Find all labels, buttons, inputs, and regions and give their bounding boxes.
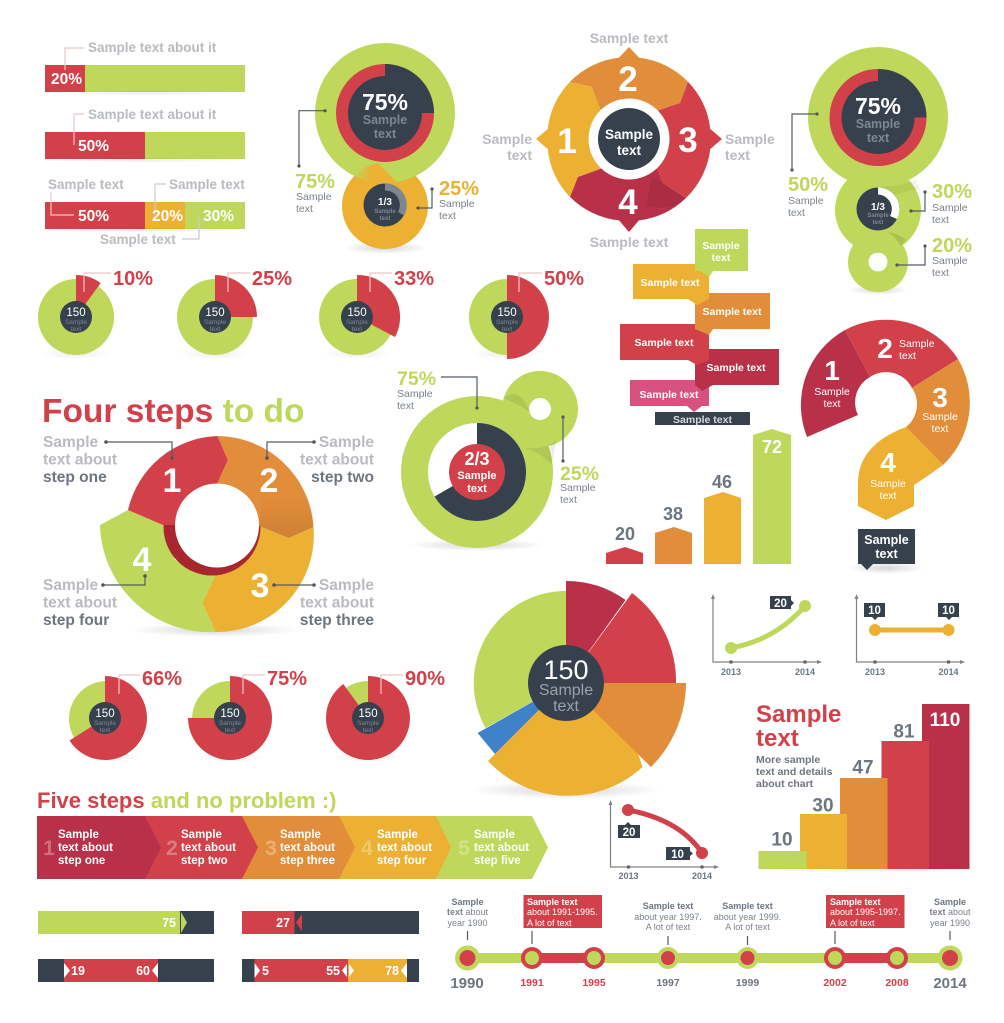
chart: chained donuts 50 30 20 percent: text xyxy=(932,267,949,279)
callout: dark sample text xyxy=(858,529,915,570)
chart: four steps ring: step three xyxy=(300,612,374,629)
line chart: falling 20 to 10 xyxy=(608,800,719,881)
chart: four arrow wheel: 4 xyxy=(618,183,638,222)
pie: 66 percent: Sample xyxy=(94,720,116,727)
pie: 10 percent: Sample xyxy=(65,319,87,326)
row: small pies 10 to 50 percent xyxy=(38,268,584,359)
bar: 20 percent xyxy=(45,40,245,96)
node: 1995 xyxy=(582,947,606,989)
note: red box 1995-1997 xyxy=(826,895,904,944)
chart: four steps ring: Sample xyxy=(319,577,374,594)
note: year 1997: about year 1997. xyxy=(634,912,702,922)
chart: five step arrows: text about xyxy=(474,842,529,854)
note: red box 1995-1997: Sample text xyxy=(830,897,881,907)
chart: chained donuts 50 30 20 percent: text xyxy=(873,220,883,226)
pie: 90 percent xyxy=(326,668,445,762)
bar: 50 20 30 percent: Sample text xyxy=(169,177,245,192)
pie: 25 percent: text xyxy=(210,326,220,333)
row: small pies 66 to 90 percent xyxy=(69,668,445,762)
chart: four arrow wheel: text xyxy=(507,147,532,163)
chart: looped donut two thirds: 25% xyxy=(560,463,599,485)
chart: four steps ring: text about xyxy=(300,594,374,612)
pie: 25 percent: 25% xyxy=(252,268,292,290)
line chart: rising 20: 2014 xyxy=(795,667,815,677)
title: five steps: Five steps and no problem :) xyxy=(37,788,336,813)
chart: question mark segments: text xyxy=(880,490,897,502)
note: red box 1991-1995: about 1991-1995. xyxy=(527,907,598,917)
line chart: falling 20 to 10: 10 xyxy=(671,849,684,861)
pie: 33 percent xyxy=(319,268,434,359)
note: year 2014: text about xyxy=(929,907,971,917)
chart: four arrow wheel: 2 xyxy=(618,60,638,99)
chart: question mark segments: 3 xyxy=(932,382,948,413)
range bar: 27 xyxy=(242,911,419,934)
note: year 1999: about year 1999. xyxy=(714,912,781,922)
tag: pink xyxy=(630,380,709,412)
bar: 50 20 30 percent: Sample text xyxy=(100,232,176,247)
chart: chained donuts 50 30 20 percent: 50% xyxy=(788,174,828,196)
chart: looped donut two thirds: text xyxy=(467,483,487,495)
line chart: rising 20: 20 xyxy=(774,598,787,610)
chart: question mark segments: text xyxy=(899,350,916,362)
note: year 2014: Sample xyxy=(934,897,966,907)
tag: red xyxy=(620,324,709,365)
chart: exploded pie 150: 150 xyxy=(543,655,589,685)
tag: amber xyxy=(633,264,709,305)
chart: linked donuts 75 and 25 percent: Sample xyxy=(363,113,407,127)
range bar: 75 xyxy=(38,911,214,934)
chart: arrow bars 20 38 46 72: 38 xyxy=(663,504,683,524)
note: year 1999: A lot of text xyxy=(725,922,770,932)
chart: five step arrows: step two xyxy=(181,855,228,867)
chart: five step arrows: 1 xyxy=(43,837,55,860)
chart: five step arrows: Sample xyxy=(474,829,515,841)
line chart: flat 10: 10 xyxy=(868,605,881,617)
bar: 50 percent xyxy=(45,107,245,163)
line chart: rising 20 xyxy=(711,594,822,677)
note: red box 1991-1995: A lot of text xyxy=(527,918,572,928)
chart: five step arrows: step five xyxy=(474,855,521,867)
tag: orange: Sample text xyxy=(703,306,762,318)
pie: 90 percent: 150 xyxy=(358,708,378,720)
chart: chained donuts 50 30 20 percent: 75% xyxy=(855,93,901,119)
pie: 10 percent: 10% xyxy=(113,268,153,290)
chart: stair bars: 10 xyxy=(771,830,793,850)
bar: 50 20 30 percent: Sample text xyxy=(48,177,124,192)
callout: dark sample text: Sample xyxy=(864,533,909,547)
chart: looped donut two thirds: 2/3 xyxy=(464,449,490,469)
chart: chained donuts 50 30 20 percent: text xyxy=(932,214,949,226)
chart: chained donuts 50 30 20 percent: Sample xyxy=(932,255,968,267)
chart: four steps ring: 4 xyxy=(133,541,152,579)
node: 2002: 2002 xyxy=(823,977,847,989)
note: year 2014: year 1990 xyxy=(930,918,970,928)
note: year 1999: Sample text xyxy=(722,901,773,911)
note: year 1997 xyxy=(634,901,702,945)
chart: five step arrows: 3 xyxy=(265,837,277,860)
chart: linked donuts 75 and 25 percent: 25% xyxy=(439,178,479,200)
chart: five step arrows: Sample xyxy=(58,829,99,841)
chart: four arrow wheel: text xyxy=(725,147,750,163)
chart: five step arrows: step one xyxy=(58,855,105,867)
note: year 1990: text about xyxy=(447,907,489,917)
pie: 75 percent: 75% xyxy=(267,668,307,690)
node: 2008: 2008 xyxy=(885,977,909,989)
chart: five step arrows: 2 xyxy=(166,837,178,860)
bar: 50 20 30 percent: 50% xyxy=(78,208,109,225)
pie: 50 percent: text xyxy=(502,326,512,333)
pie: 66 percent: 150 xyxy=(95,708,115,720)
pie: 75 percent xyxy=(188,668,307,762)
note: year 1997: Sample text xyxy=(643,901,693,911)
pie: 66 percent: text xyxy=(100,727,110,734)
range bar: 19 to 60: 19 xyxy=(71,964,85,978)
node: 2002 xyxy=(823,947,847,989)
note: year 1990 xyxy=(447,897,489,940)
pie: 90 percent: text xyxy=(363,727,373,734)
tag: crimson xyxy=(695,349,779,391)
chart: question mark segments: Sample xyxy=(899,338,935,350)
chart: question mark segments: Sample xyxy=(814,386,850,398)
line chart: falling 20 to 10: 2013 xyxy=(618,871,639,881)
chart: looped donut two thirds: text xyxy=(397,400,414,412)
chart: linked donuts 75 and 25 percent xyxy=(295,43,479,254)
timeline xyxy=(447,895,971,992)
chart: five step arrows: text about xyxy=(181,842,236,854)
note: year 1997: A lot of text xyxy=(646,922,691,932)
node: 2008 xyxy=(885,947,909,989)
pie: 25 percent xyxy=(177,268,292,359)
chart: four steps ring: text about xyxy=(300,452,374,468)
chart: four arrow wheel: 1 xyxy=(557,122,577,161)
chart: arrow bars 20 38 46 72: 46 xyxy=(712,472,732,492)
note: red box 1991-1995 xyxy=(524,895,602,944)
chart: four arrow wheel: Sample xyxy=(725,131,775,147)
chart: five step arrows: Sample xyxy=(181,829,222,841)
chart: chained donuts 50 30 20 percent: Sample xyxy=(788,195,824,207)
tag: green: Sample xyxy=(702,240,740,252)
chart: stair bars xyxy=(754,701,974,873)
chart: stair bars: 47 xyxy=(852,758,874,778)
chart: stair bars: More sample xyxy=(756,754,820,766)
chart: chained donuts 50 30 20 percent: text xyxy=(788,207,805,219)
note: year 1990: year 1990 xyxy=(447,918,488,928)
pie: 66 percent: 66% xyxy=(142,668,182,690)
note: red box 1995-1997: about 1995-1997. xyxy=(830,907,901,917)
chart: chained donuts 50 30 20 percent: 1/3 xyxy=(871,202,885,213)
node: 1991 xyxy=(520,947,544,989)
line chart: falling 20 to 10: 2014 xyxy=(692,871,712,881)
note: year 2014 xyxy=(929,897,971,940)
tag: green: text xyxy=(712,252,731,264)
pie: 90 percent: Sample xyxy=(357,720,379,727)
chart: exploded pie 150: text xyxy=(553,698,579,715)
chart: four arrow wheel: Sample xyxy=(605,127,653,142)
tag: crimson: Sample text xyxy=(707,362,766,374)
title: four steps to do: Four steps to do xyxy=(42,393,304,430)
chart: linked donuts 75 and 25 percent: 75% xyxy=(362,89,408,115)
bar: 20 percent: 20% xyxy=(51,71,82,88)
pie: 25 percent: 150 xyxy=(205,307,225,319)
line chart: falling 20 to 10: 20 xyxy=(623,827,635,839)
tag: dark xyxy=(655,412,750,426)
pie: 33 percent: 33% xyxy=(394,268,434,290)
chart: chained donuts 50 30 20 percent: 30% xyxy=(932,181,972,203)
node: 1995: 1995 xyxy=(582,977,606,989)
chart: five step arrows: 4 xyxy=(361,837,373,860)
pie: 66 percent xyxy=(69,668,182,762)
pie: 75 percent: Sample xyxy=(219,720,241,727)
note: year 1999 xyxy=(714,901,781,945)
pie: 90 percent: 90% xyxy=(405,668,445,690)
chart: chained donuts 50 30 20 percent: Sample xyxy=(856,117,900,131)
pie: 10 percent: 150 xyxy=(66,307,86,319)
chart: linked donuts 75 and 25 percent: Sample xyxy=(439,198,475,210)
chart: stair bars: about chart xyxy=(756,778,814,790)
chart: question mark segments xyxy=(801,320,970,574)
bar: 50 percent: 50% xyxy=(78,138,109,155)
chart: four steps ring: 3 xyxy=(251,567,269,605)
node: 1997: 1997 xyxy=(656,977,680,989)
chart: five step arrows: text about xyxy=(280,842,335,854)
chart: linked donuts 75 and 25 percent: text xyxy=(374,127,397,141)
chart: stair bars: text and details xyxy=(756,766,833,778)
chart: chained donuts 50 30 20 percent: Sample xyxy=(932,202,968,214)
chart: arrow bars 20 38 46 72: 20 xyxy=(615,524,635,544)
pie: 33 percent: Sample xyxy=(346,319,368,326)
chart: four steps ring: Sample xyxy=(43,577,99,594)
chart: linked donuts 75 and 25 percent: text xyxy=(380,216,390,222)
pie: 10 percent xyxy=(38,268,153,359)
chart: linked donuts 75 and 25 percent: Sample xyxy=(296,191,332,203)
line chart: rising 20: 2013 xyxy=(721,667,741,677)
chart: looped donut two thirds: Sample xyxy=(397,388,433,400)
bar: 50 20 30 percent xyxy=(45,177,245,247)
chart: exploded pie 150: Sample xyxy=(539,682,593,699)
node: 1990 xyxy=(450,946,484,992)
chart: stair bars: 30 xyxy=(812,796,834,816)
chart: four steps ring: Sample xyxy=(319,434,374,451)
chart: four steps ring: text about xyxy=(43,452,117,468)
chart: question mark segments: 4 xyxy=(880,447,896,478)
pie: 50 percent: Sample xyxy=(496,319,518,326)
line chart: flat 10 xyxy=(854,594,965,677)
chart: four steps ring: step two xyxy=(311,469,374,486)
chart: looped donut two thirds xyxy=(397,368,599,551)
line chart: flat 10: 2013 xyxy=(865,667,885,677)
pie: 75 percent: text xyxy=(225,727,235,734)
node: 1997 xyxy=(656,947,680,989)
chart: question mark segments: Sample xyxy=(870,478,906,490)
chart: chained donuts 50 30 20 percent: text xyxy=(867,131,890,145)
chart: four arrow wheel: 3 xyxy=(678,121,698,160)
chart: four steps ring: step four xyxy=(43,612,109,629)
chart: arrow bars 20 38 46 72: 72 xyxy=(762,437,782,457)
node: 1991: 1991 xyxy=(520,977,544,989)
chart: linked donuts 75 and 25 percent: 75% xyxy=(295,171,335,193)
chart: four arrow wheel xyxy=(482,30,775,250)
chart: five step arrows: step three xyxy=(280,855,335,867)
range bars xyxy=(38,911,419,982)
pie: 50 percent xyxy=(469,268,584,359)
chart: arrow bars 20 38 46 72 xyxy=(606,429,791,564)
chart: stair bars: 110 xyxy=(930,710,960,731)
bar: 50 20 30 percent: 20% xyxy=(152,208,183,225)
range bar: 5 55 78: 55 xyxy=(326,964,340,978)
range bar: 27: 27 xyxy=(276,916,290,930)
pie: 75 percent: 150 xyxy=(220,708,240,720)
range bar: 75: 75 xyxy=(162,916,176,930)
chart: linked donuts 75 and 25 percent: 1/3 xyxy=(378,197,392,208)
range bar: 19 to 60 xyxy=(38,959,214,982)
chart: chained donuts 50 30 20 percent xyxy=(788,47,972,295)
pie: 50 percent: 50% xyxy=(544,268,584,290)
chart: linked donuts 75 and 25 percent: text xyxy=(439,210,456,222)
chart: five step arrows xyxy=(37,816,548,879)
chart: five step arrows: Sample xyxy=(377,829,418,841)
range bar: 5 55 78 xyxy=(242,959,419,982)
tag: dark: Sample text xyxy=(673,414,732,426)
node: 2014: 2014 xyxy=(933,975,967,992)
tag: pink: Sample text xyxy=(640,389,699,401)
chart: five step arrows: text about xyxy=(58,842,113,854)
pie: 10 percent: text xyxy=(71,326,81,333)
chart: stair bars: Sample xyxy=(756,701,841,728)
panel: progress bars xyxy=(45,40,245,247)
chart: five step arrows: text about xyxy=(377,842,432,854)
bar: 20 percent: Sample text about it xyxy=(88,40,217,55)
note: red box 1995-1997: A lot of text xyxy=(830,918,875,928)
pie: 25 percent: Sample xyxy=(204,319,226,326)
chart: four steps ring: 1 xyxy=(163,462,181,500)
chart: looped donut two thirds: Sample xyxy=(457,470,497,482)
range bar: 5 55 78: 5 xyxy=(262,964,269,978)
chart: question mark segments: 1 xyxy=(824,355,840,386)
chart: linked donuts 75 and 25 percent: Sample xyxy=(374,209,396,215)
chart: chained donuts 50 30 20 percent: Sample xyxy=(867,213,889,219)
chart: exploded pie 150 xyxy=(471,581,686,799)
tag: red: Sample text xyxy=(635,337,694,349)
pie: 33 percent: 150 xyxy=(347,307,367,319)
chart: question mark segments: 2 xyxy=(877,333,893,364)
tag: orange xyxy=(695,293,770,335)
callout: dark sample text: text xyxy=(875,547,898,561)
chart: chained donuts 50 30 20 percent: 20% xyxy=(932,235,972,257)
chart: five step arrows: 5 xyxy=(458,837,470,860)
pie: 33 percent: text xyxy=(352,326,362,333)
node: 1999: 1999 xyxy=(736,977,759,989)
chart: four arrow wheel: text xyxy=(617,143,642,158)
note: red box 1991-1995: Sample text xyxy=(527,897,578,907)
chart: four steps ring: 2 xyxy=(260,462,278,500)
note: year 1990: Sample xyxy=(451,897,484,907)
chart: four steps ring: step one xyxy=(43,469,107,486)
line chart: flat 10: 2014 xyxy=(938,667,959,677)
chart: four arrow wheel: Sample text xyxy=(590,30,669,46)
chart: question mark segments: Sample xyxy=(922,411,958,423)
chart: five step arrows: step four xyxy=(377,855,427,867)
tag: amber: Sample text xyxy=(641,277,700,289)
node: 1990: 1990 xyxy=(450,975,484,992)
pie: 50 percent: 150 xyxy=(497,307,517,319)
line chart: flat 10: 10 xyxy=(942,605,955,617)
bar: 50 20 30 percent: 30% xyxy=(203,208,234,225)
chart: four arrow wheel: Sample xyxy=(482,131,532,147)
chart: stair bars: text xyxy=(756,725,799,752)
chart: five step arrows: Sample xyxy=(280,829,321,841)
chart: four arrow wheel: Sample text xyxy=(590,234,669,250)
range bar: 19 to 60: 60 xyxy=(136,964,150,978)
chart: question mark segments: text xyxy=(932,423,949,435)
chart: looped donut two thirds: 75% xyxy=(397,368,436,390)
tag: green xyxy=(695,229,748,277)
chart: looped donut two thirds: text xyxy=(560,494,577,506)
node: 1999 xyxy=(736,947,759,989)
chart: four steps ring: Sample xyxy=(43,434,99,451)
range bar: 5 55 78: 78 xyxy=(385,964,399,978)
chart: four steps ring xyxy=(43,434,374,637)
chart: stair bars: 81 xyxy=(893,722,915,742)
bar: 50 percent: Sample text about it xyxy=(88,107,217,122)
chart: question mark segments: text xyxy=(824,398,841,410)
chart: looped donut two thirds: Sample xyxy=(560,482,596,494)
chart: four steps ring: text about xyxy=(43,594,117,612)
chart: linked donuts 75 and 25 percent: text xyxy=(296,203,313,215)
node: 2014 xyxy=(933,946,967,992)
tooltip stack xyxy=(620,229,779,426)
